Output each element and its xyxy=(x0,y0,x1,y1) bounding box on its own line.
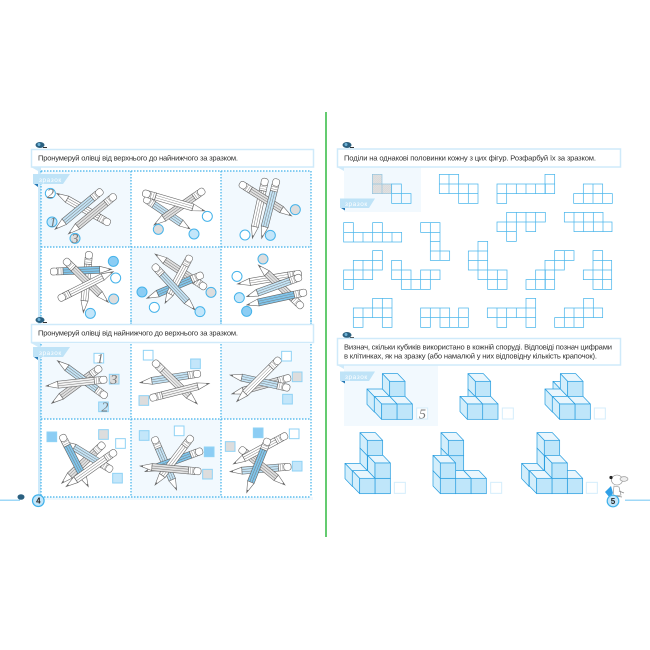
instruction banner: Пронумеруй олівці від верхнього до найнижчого за зразком. xyxy=(38,154,238,162)
sample tag xyxy=(33,347,70,360)
puzzle 1 sample: 3 xyxy=(71,232,79,247)
figure xyxy=(583,251,612,289)
snail icon xyxy=(342,332,354,338)
sample tag: зразок xyxy=(345,201,368,208)
snail icon xyxy=(36,317,47,323)
puzzle 6 xyxy=(232,254,307,316)
structure xyxy=(433,433,502,494)
page number 5 footer with dog mascot xyxy=(605,475,650,507)
icon: dog mascot xyxy=(605,475,628,498)
sample tag xyxy=(340,198,375,210)
structure xyxy=(522,433,597,494)
sample structure: 5 xyxy=(419,408,426,423)
instruction banner xyxy=(31,324,314,347)
puzzle 1 sample xyxy=(45,187,118,247)
dotted grid xyxy=(41,320,311,497)
sample tag: зразок xyxy=(39,177,62,184)
sample tag: зразок xyxy=(39,350,62,357)
cube structures xyxy=(345,374,605,494)
sample tag: зразок xyxy=(345,374,368,381)
figure xyxy=(421,223,450,260)
puzzle 2 xyxy=(142,187,212,239)
instruction banner: Поділи на однакові половинки кожну з цих фігур. Розфарбуй їх за зразком. xyxy=(344,154,596,162)
puzzle 4 xyxy=(47,430,125,490)
structure xyxy=(345,433,405,494)
figure xyxy=(487,298,536,327)
dotted grid xyxy=(41,171,311,325)
puzzle 1 sample: 2 xyxy=(101,401,108,416)
sample tag xyxy=(33,174,70,187)
snail icon xyxy=(36,142,47,148)
panel: right page exercise 3, divide figures into halves xyxy=(337,142,620,327)
puzzle 4 xyxy=(50,251,121,318)
puzzle 1 sample: 1 xyxy=(97,352,104,367)
figure xyxy=(392,260,440,289)
figure xyxy=(344,251,382,289)
page number 4 footer xyxy=(0,494,44,507)
figure xyxy=(555,298,603,327)
figure xyxy=(497,212,545,241)
pencil puzzles xyxy=(46,350,302,494)
sample tag xyxy=(340,372,375,384)
puzzle 1 sample: 1 xyxy=(49,216,56,231)
snail icon xyxy=(342,142,354,148)
figure xyxy=(439,174,478,203)
puzzle 3 xyxy=(229,351,302,404)
sample background xyxy=(344,167,421,212)
puzzle 5 xyxy=(139,426,214,491)
puzzle 1 sample: 2 xyxy=(47,187,54,202)
instruction banner xyxy=(337,338,620,369)
pencil puzzles xyxy=(45,178,307,318)
figure xyxy=(468,241,507,289)
sample background xyxy=(344,365,438,426)
sample structure xyxy=(367,374,428,423)
instruction banner: Пронумеруй олівці від найнижчого до верхнього за зразком. xyxy=(38,328,238,338)
instruction banner xyxy=(31,150,314,171)
figure xyxy=(344,223,402,242)
puzzle 2 xyxy=(139,350,210,407)
structure xyxy=(460,374,513,419)
puzzle 1 sample xyxy=(46,352,119,416)
figure xyxy=(421,308,468,327)
panel: right page exercise 4, count the cubes xyxy=(337,332,620,494)
instruction banner: в клітинках, як на зразку (або намалюй у них відповідну кількість крапочок). xyxy=(344,352,597,360)
sample figure half shaded xyxy=(372,174,411,203)
puzzle 6 xyxy=(225,428,302,494)
page number 4 footer: 4 xyxy=(36,496,41,506)
structure xyxy=(545,374,605,419)
puzzle 3 xyxy=(238,178,300,240)
puzzle 1 sample: 3 xyxy=(109,373,117,388)
instruction banner: Визнач, скільки кубиків використано в кожній споруді. Відповіді познач цифрами xyxy=(344,342,612,352)
centre divider line xyxy=(325,112,327,537)
figure xyxy=(526,251,574,289)
polyomino figures xyxy=(344,174,612,327)
page number 5 footer with dog mascot: 5 xyxy=(611,497,616,506)
figure xyxy=(353,298,392,327)
exercise grid backgrounds xyxy=(41,344,313,500)
exercise grid backgrounds xyxy=(38,167,313,499)
figure xyxy=(574,184,612,203)
figure xyxy=(564,212,612,232)
instruction banner xyxy=(337,149,620,171)
puzzle 5 xyxy=(137,251,216,317)
panel: left page exercise 2, number pencils bottom to top xyxy=(31,317,314,500)
figure xyxy=(497,174,555,203)
panel: left page exercise 1, number pencils top to bottom xyxy=(31,142,314,499)
